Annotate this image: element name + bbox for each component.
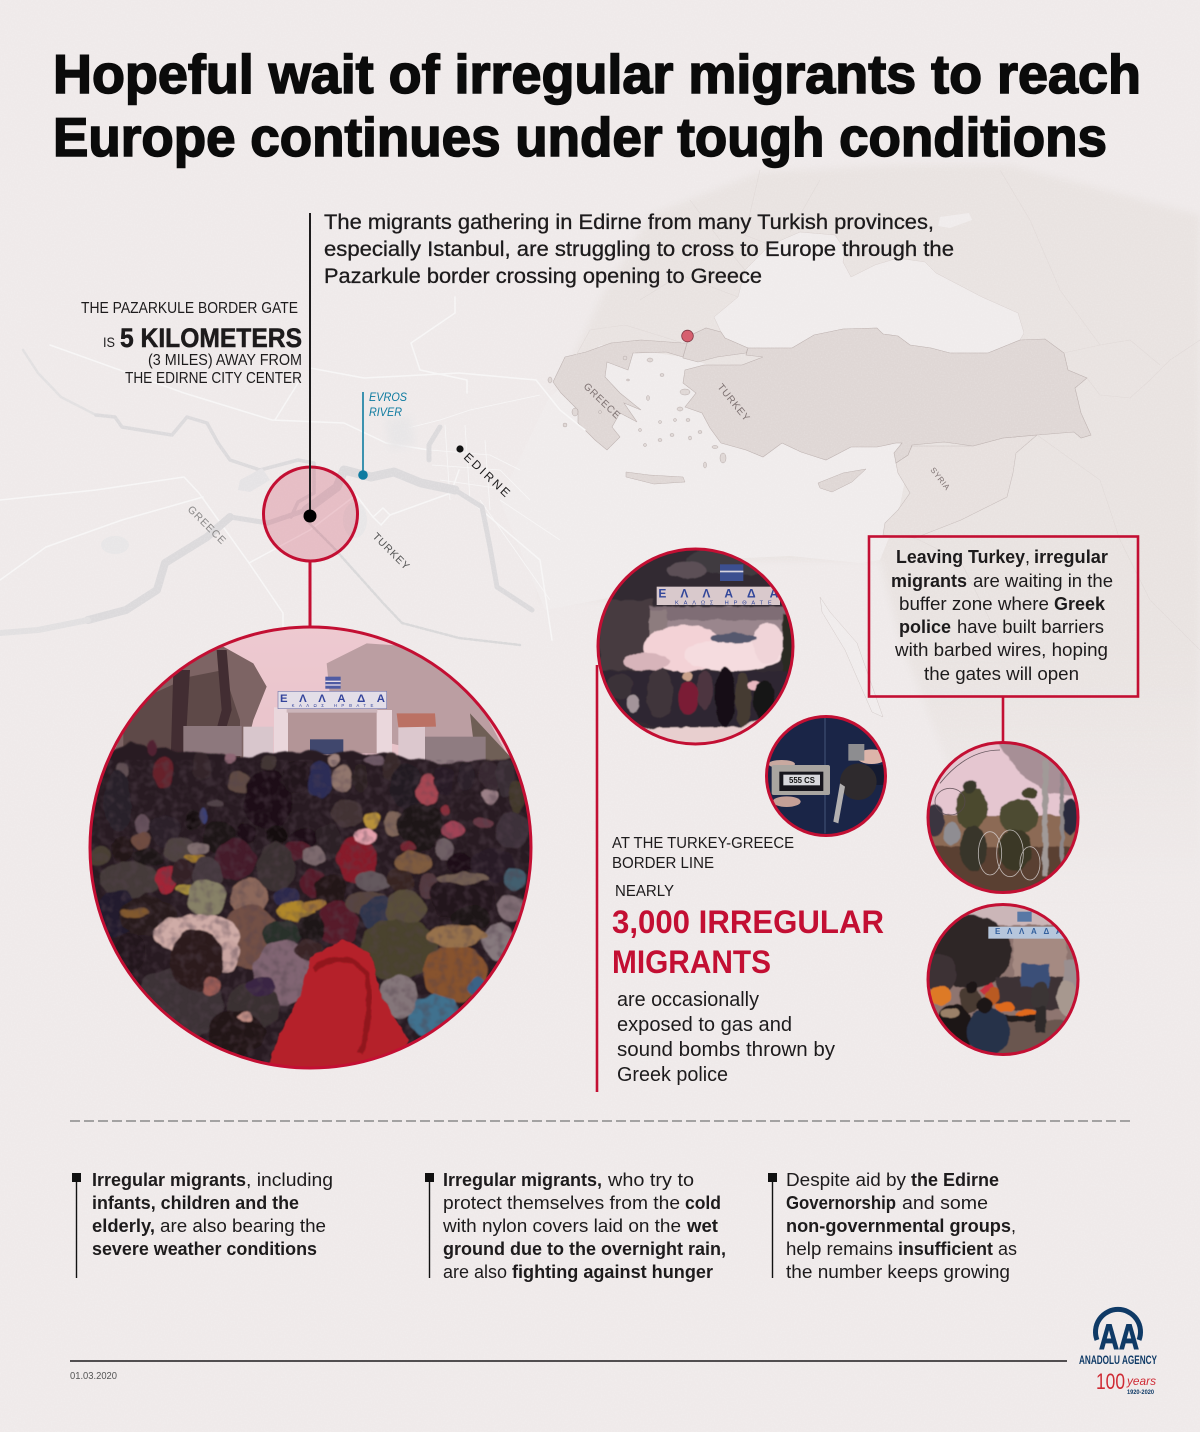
text column 3: , [1011,1216,1016,1236]
text column 3: as [998,1239,1017,1259]
text column 2: protect themselves from the [443,1193,680,1213]
text column 1: are also bearing the [160,1216,326,1236]
logo: Anadolu Agency: years [1126,1374,1156,1388]
label: Evros River: EVROS [369,390,407,404]
text column 3 [768,1170,1017,1282]
label: Edirne: EDIRNE [461,450,513,500]
text column 1: infants, children and the [92,1193,299,1213]
Greece [553,340,687,450]
label: Evros River: RIVER [369,405,402,419]
locator pin [682,330,693,342]
callout: 3,000 irregular migrants [597,665,884,1092]
callout: 3,000 irregular migrants: Greek police [617,1064,728,1086]
map: regional context of Turkey and Greece [500,165,1200,900]
photo: Greek soldiers at barbed wire [926,741,1080,894]
callout box: buffer zone: irregular [1034,547,1108,567]
map country labels: GREECE [185,504,228,547]
text column 2 [425,1170,726,1282]
map country labels: TURKEY [715,382,752,424]
flag [325,677,341,689]
photo: crowd at Pazarkule gate [80,620,547,1087]
text column 1 [72,1170,333,1278]
callout box: buffer zone: have built barriers [957,617,1104,637]
text column 1: Irregular migrants [92,1170,246,1190]
photo: tear gas smoke at the border gate: ΕΛΛΑΔΑ [658,586,779,600]
text column 2: who try to [607,1170,694,1190]
callout: 3,000 irregular migrants: 3,000 IRREGULAR [612,904,884,940]
callout box: buffer zone [869,536,1138,743]
callout: 3,000 irregular migrants: sound bombs thrown by [617,1039,835,1061]
title [53,43,1141,168]
callout: 3,000 irregular migrants: exposed to gas and [617,1014,792,1036]
photo: burning barricade [926,903,1080,1056]
logo: Anadolu Agency: 100 [1096,1369,1125,1394]
text column 2: fighting against hunger [512,1262,713,1282]
text column 3: Despite aid by [786,1170,906,1190]
logo: Anadolu Agency: AA [1099,1318,1139,1357]
logo: Anadolu Agency [1079,1309,1157,1396]
map country labels [185,381,952,572]
photo: crowd at Pazarkule gate: ΚΑΛΩΣ ΗΡΘΑΤΕ [292,703,373,708]
photo: tear gas canisters: 555 CS [789,775,815,785]
callout: distance to border gate [81,300,302,387]
callout box: buffer zone: migrants [891,571,967,591]
text column 2: ground due to the overnight rain, [443,1239,726,1259]
text column 3: non-governmental groups [786,1216,1011,1236]
map: Edirne local area [0,297,585,645]
text column 2: cold [685,1193,721,1213]
text column 3: insufficient [898,1239,993,1259]
intro text: especially Istanbul, are struggling to cross to Europe through the [324,238,954,261]
river [0,350,532,645]
callout box: buffer zone: with barbed wires, hoping [894,640,1108,660]
text column 3: Governorship [786,1193,896,1213]
callout box: buffer zone: , [1025,547,1030,567]
photo: tear gas smoke at the border gate: ΚΑΛΩΣ ΗΡΘΑΤΕ [675,600,772,606]
title: Hopeful wait of irregular migrants to reach [53,43,1141,105]
text column 3: help remains [786,1239,893,1259]
callout: 3,000 irregular migrants: are occasionally [617,989,759,1011]
photo: crowd at Pazarkule gate: ΕΛΛΑΔΑ [280,693,385,705]
intro text: The migrants gathering in Edirne from many Turkish provinces, [324,211,934,234]
text column 2: with nylon covers laid on the [442,1216,681,1236]
label: Evros River [358,390,407,480]
text column 3: the Edirne [911,1170,999,1190]
text column 3: the number keeps growing [786,1262,1010,1282]
callout: distance to border gate: IS [103,334,115,350]
callout: 3,000 irregular migrants: AT THE TURKEY-GREECE [612,835,794,852]
text column 2: are also [443,1262,507,1282]
title: Europe continues under tough conditions [53,106,1107,168]
text column 2: wet [686,1216,718,1236]
map country labels: TURKEY [370,531,412,572]
logo: Anadolu Agency: ANADOLU AGENCY [1079,1355,1157,1367]
logo: Anadolu Agency: 1920-2020 [1127,1390,1155,1396]
photo: tear gas smoke at the border gate [596,548,794,746]
intro text [324,211,954,288]
text column 1: , including [246,1170,333,1190]
text column 1: elderly, [92,1216,155,1236]
callout box: buffer zone: the gates will open [924,664,1079,684]
callout: distance to border gate: THE EDIRNE CITY CENTER [125,370,302,387]
callout box: buffer zone: buffer zone where [899,594,1049,614]
callout: 3,000 irregular migrants: MIGRANTS [612,944,771,980]
gate sign [278,691,387,709]
text column 3: and some [902,1193,988,1213]
photo: burning barricade: ΕΛΛΑΔΑ [995,927,1062,936]
Pazarkule marker circle [264,213,358,626]
text column 2: Irregular migrants, [443,1170,602,1190]
callout: distance to border gate: (3 MILES) AWAY FROM [148,352,302,369]
callout box: buffer zone: are waiting in the [973,571,1113,591]
callout box: buffer zone: Greek [1054,594,1106,614]
intro text: Pazarkule border crossing opening to Greece [324,265,762,288]
callout box: buffer zone: Leaving Turkey [896,547,1025,567]
text column 1: severe weather conditions [92,1239,317,1259]
callout: distance to border gate: 5 KILOMETERS [120,323,302,353]
date: 01.03.2020 [70,1371,117,1382]
Syria [883,435,1037,538]
callout: distance to border gate: THE PAZARKULE BORDER GATE [81,300,298,317]
callout: 3,000 irregular migrants: NEARLY [615,883,674,900]
photo: tear gas canisters [765,715,887,837]
Turkey [683,328,1091,463]
map country labels: SYRIA [928,466,952,492]
map country labels: GREECE [581,381,622,422]
callout: 3,000 irregular migrants: BORDER LINE [612,855,714,872]
callout box: buffer zone: police [899,617,951,637]
